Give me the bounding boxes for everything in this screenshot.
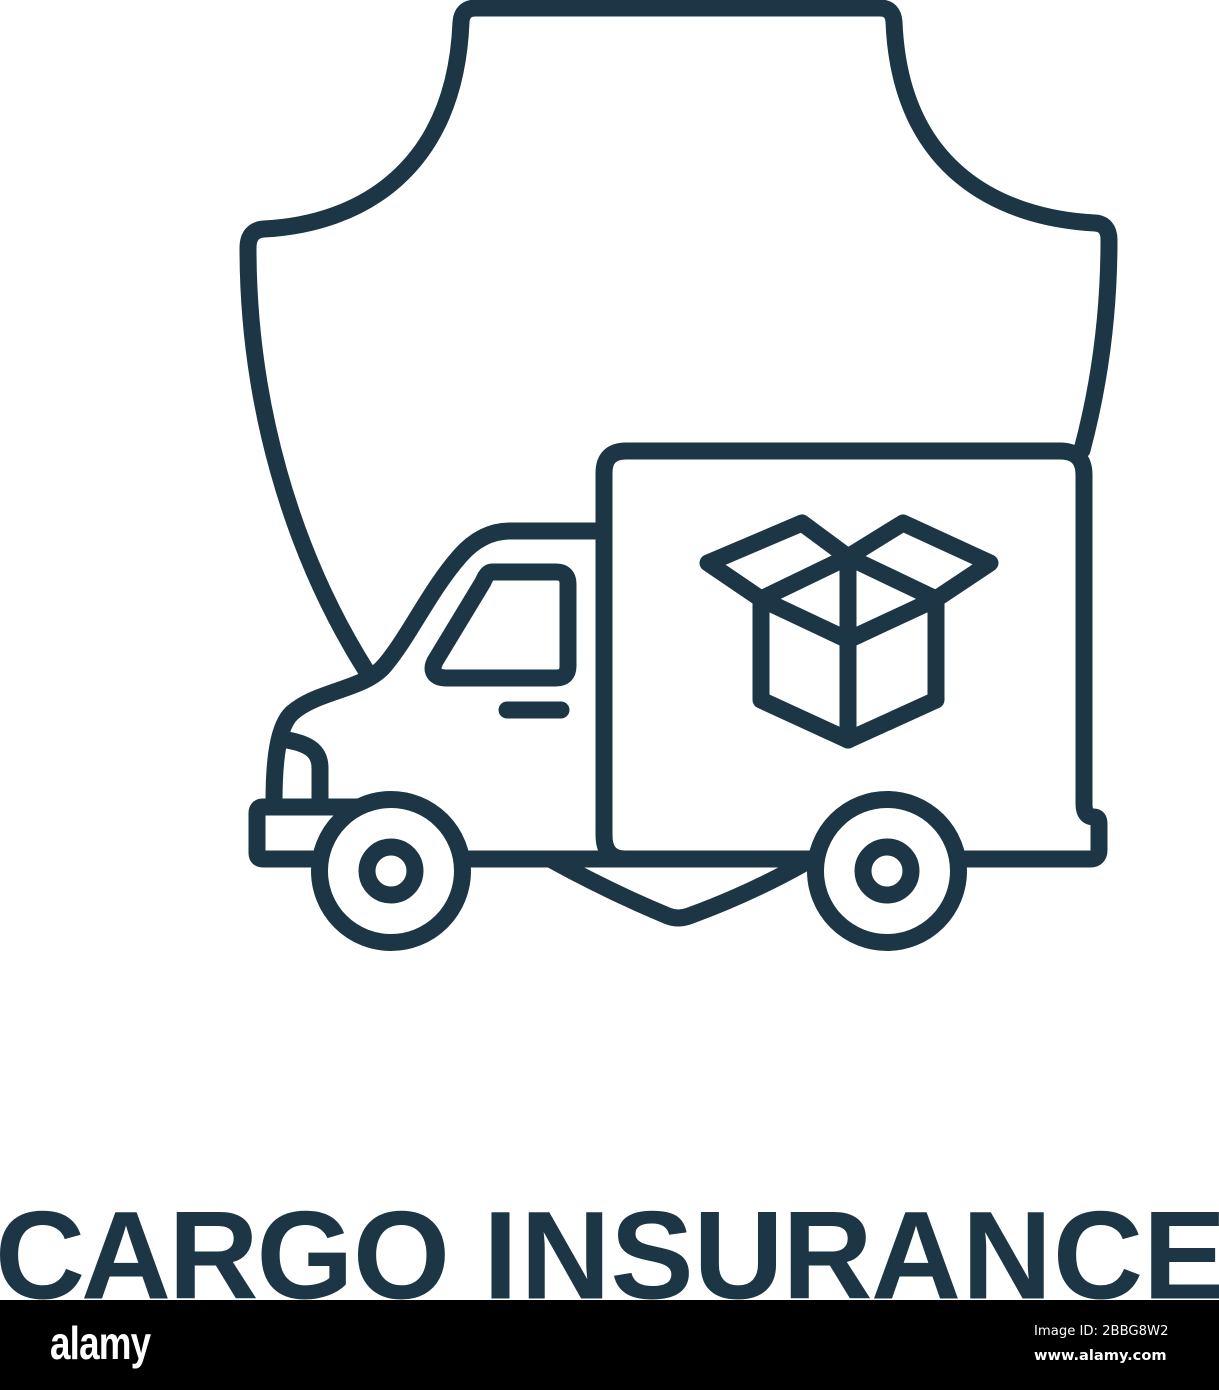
stock footer bar — [0, 1300, 1219, 1390]
cargo box container — [604, 451, 1099, 859]
cab window — [433, 572, 568, 678]
shield outline — [248, 8, 1109, 918]
door handle — [507, 702, 561, 718]
front wheel — [320, 800, 462, 942]
footer image id — [1034, 1324, 1168, 1364]
footer image id: Image ID: 2BBG8W2 — [1034, 1324, 1168, 1339]
open box icon — [708, 523, 990, 740]
truck body — [257, 531, 625, 859]
footer image id: www.alamy.com — [1034, 1347, 1167, 1364]
rear wheel — [816, 800, 958, 942]
footer logo: alamy — [50, 1317, 150, 1369]
